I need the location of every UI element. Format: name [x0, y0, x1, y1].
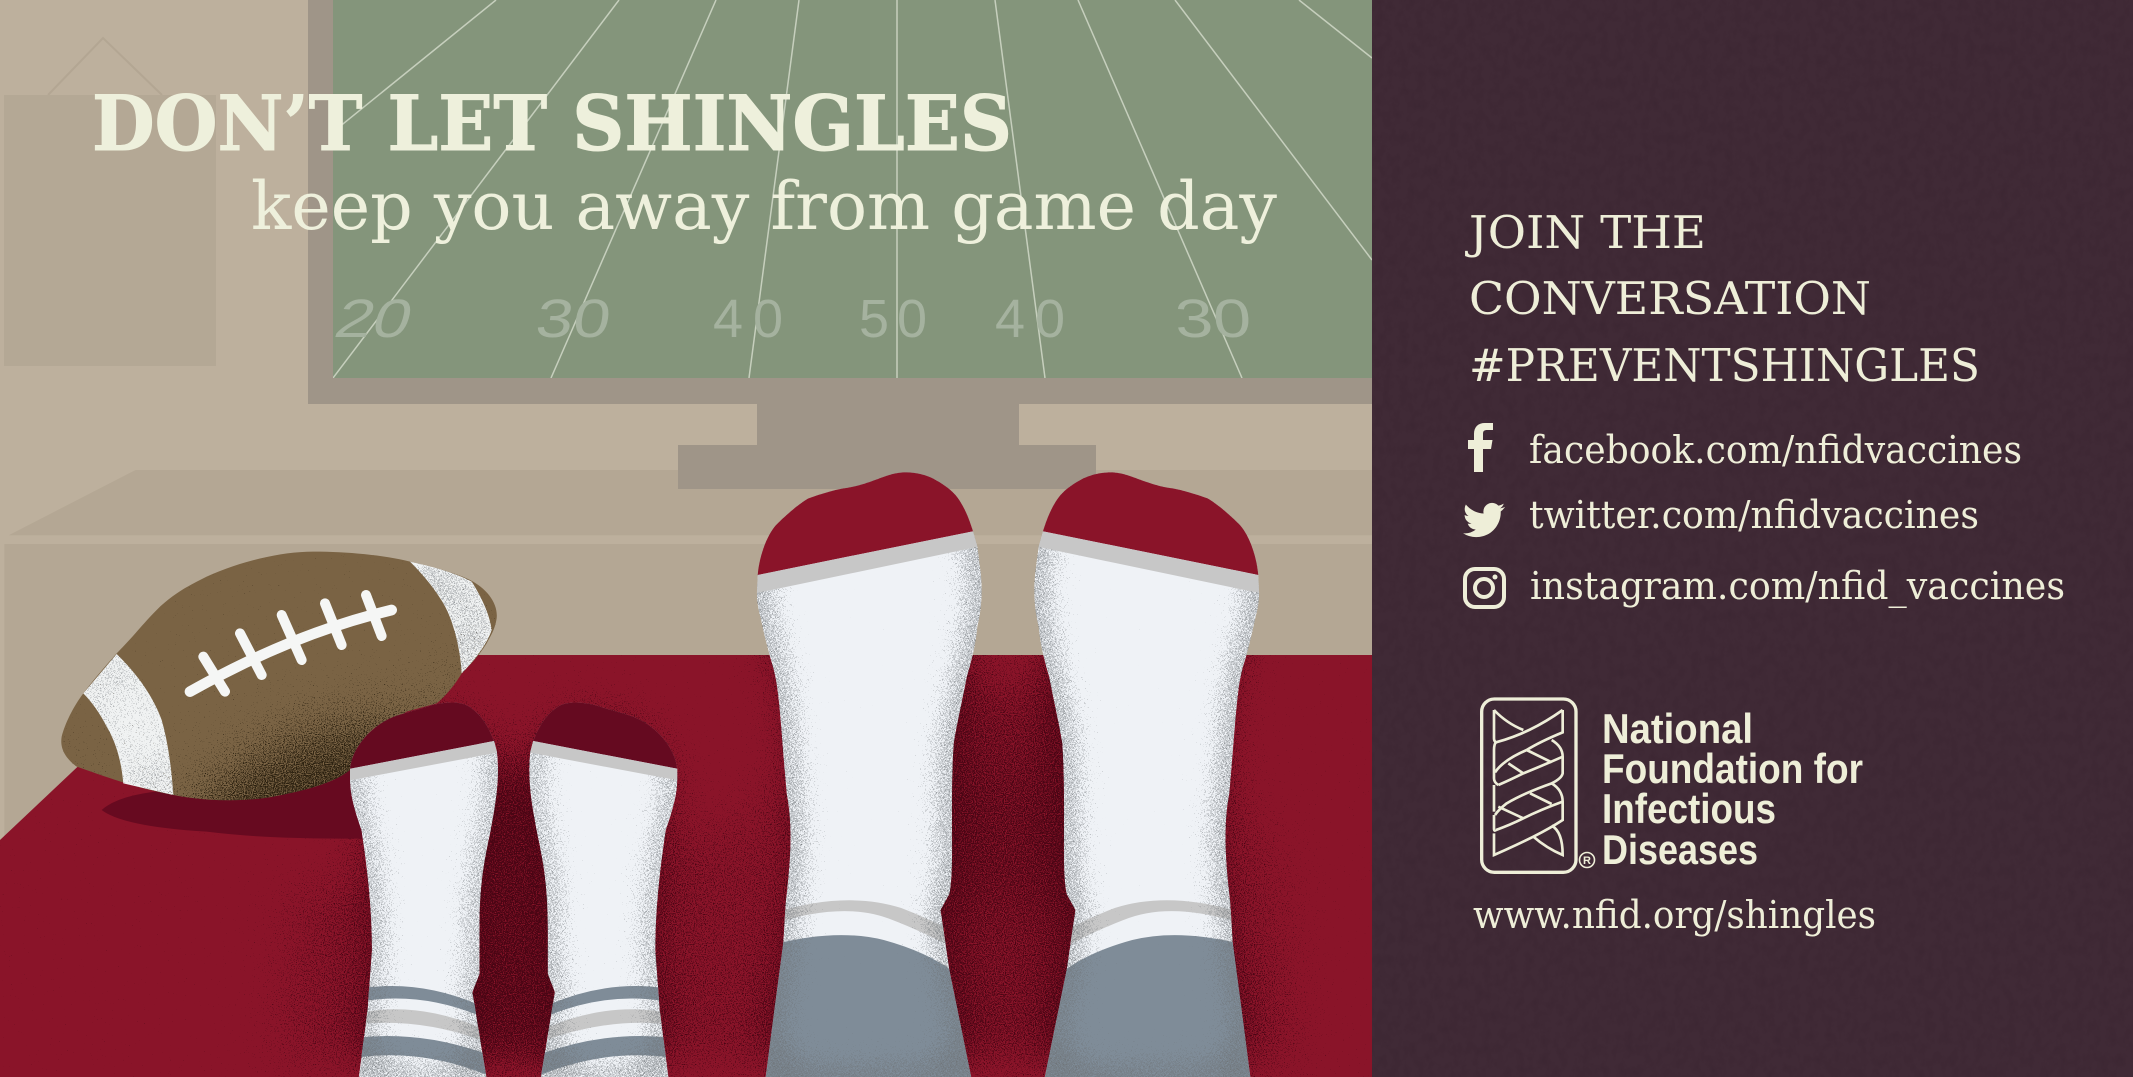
- football stripes: [83, 562, 492, 795]
- yard numbers: 30: [1173, 289, 1253, 349]
- football: [61, 552, 497, 800]
- icon: twitter: [1463, 503, 1505, 537]
- yard numbers: 30: [532, 289, 615, 349]
- panel: contact information: [1372, 0, 2133, 1077]
- television: [308, 0, 1372, 489]
- logo: NFID helix mark: [1482, 699, 1594, 872]
- twitter address: twitter.com/nfidvaccines: [1529, 493, 1979, 537]
- logo: organisation name: [1602, 705, 1863, 873]
- big left sock: [752, 466, 982, 1077]
- football field on screen: [329, 0, 1372, 378]
- yard lines: [333, 0, 1372, 378]
- logo: organisation name: National: [1602, 705, 1753, 752]
- yard numbers: 40: [995, 289, 1065, 349]
- leg shadows on the floor: [262, 472, 1312, 1077]
- headline: DON’T LET SHINGLES: [92, 79, 1012, 168]
- yard numbers: 40: [713, 289, 783, 349]
- logo: organisation name: Diseases: [1602, 826, 1758, 873]
- instagram address: instagram.com/nfid_vaccines: [1530, 564, 2065, 609]
- call to action heading: JOIN THE: [1465, 206, 1706, 259]
- icon: facebook: [1468, 423, 1493, 472]
- yard numbers: 50: [859, 289, 927, 349]
- big right sock: [1034, 466, 1264, 1077]
- subheadline: keep you away from game day: [251, 168, 1278, 245]
- facebook address: facebook.com/nfidvaccines: [1529, 428, 2022, 472]
- yard numbers: 20: [329, 288, 420, 349]
- red floor: [0, 655, 1372, 1077]
- registered mark: R: [1583, 855, 1591, 867]
- small right sock: [527, 690, 686, 1077]
- logo: organisation name: Foundation for: [1602, 745, 1863, 792]
- football laces: [190, 595, 392, 692]
- yard numbers: [336, 299, 1248, 338]
- icon: instagram: [1465, 569, 1504, 607]
- picture frame on the wall: [4, 38, 216, 366]
- wall background: [0, 0, 1372, 1077]
- small left sock: [350, 702, 498, 1077]
- call to action heading: #PREVENTSHINGLES: [1469, 339, 1980, 392]
- website address: www.nfid.org/shingles: [1473, 893, 1876, 937]
- call to action heading: CONVERSATION: [1469, 272, 1871, 325]
- call to action heading: [1465, 206, 1980, 392]
- cabinet behind the floor: [4, 470, 1372, 842]
- football shadow: [102, 763, 373, 839]
- logo: organisation name: Infectious: [1602, 785, 1776, 832]
